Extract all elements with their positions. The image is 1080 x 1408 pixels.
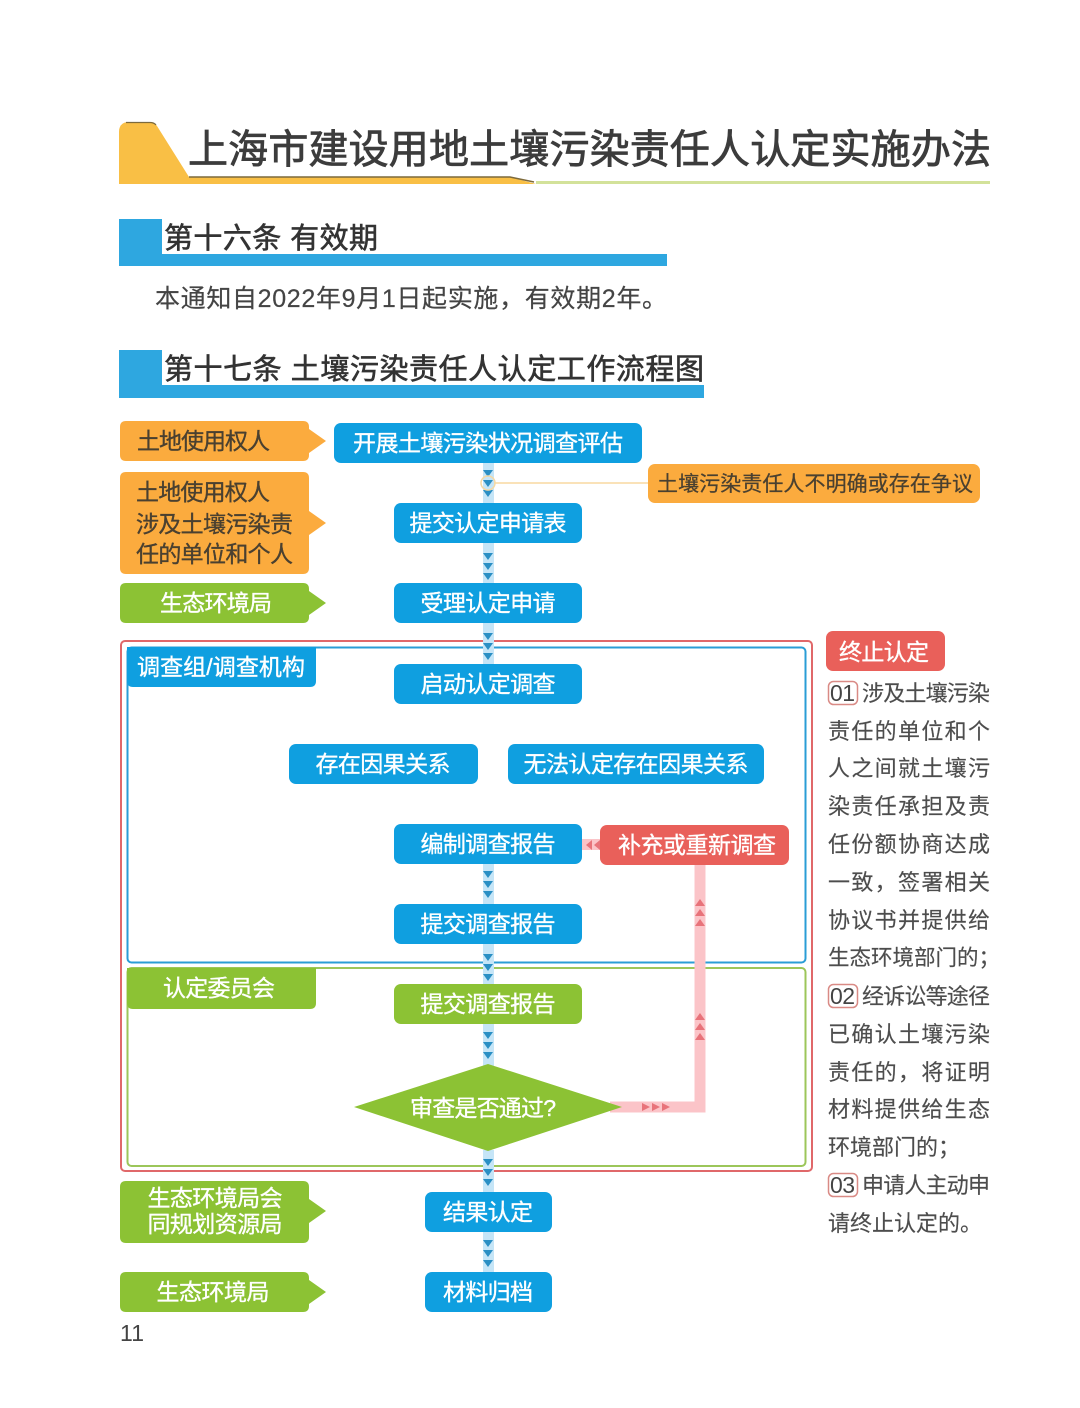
text block: termination conditions: 03 <box>830 1172 855 1198</box>
heading: article 17 <box>119 350 704 398</box>
box: submit report: 提交调查报告 <box>420 911 556 937</box>
box: submit application <box>394 503 582 543</box>
tag: bureau with planning: 生态环境局会 <box>148 1185 282 1211</box>
box: compile report <box>394 824 582 864</box>
heading: article 16: 第十六条 有效期 <box>164 222 378 255</box>
diamond: review passed: 审查是否通过? <box>410 1095 556 1121</box>
box: start survey <box>334 423 642 463</box>
text block: termination conditions: 生态环境部门的； <box>828 946 1000 970</box>
tag: ecology bureau archive: 生态环境局 <box>156 1279 270 1305</box>
tag: bureau with planning: 同规划资源局 <box>148 1211 282 1237</box>
title banner <box>119 122 991 184</box>
text block: termination conditions: 材料提供给生态 <box>828 1097 990 1122</box>
text block: termination conditions: 责任的，将证明 <box>828 1060 990 1085</box>
text block: termination conditions: 经诉讼等途径 <box>862 984 990 1009</box>
text block: termination conditions: 涉及土壤污染 <box>862 681 990 706</box>
box: start survey: 开展土壤污染状况调查评估 <box>353 430 623 456</box>
box: re-investigate: 补充或重新调查 <box>618 832 776 858</box>
label: committee <box>127 968 316 1009</box>
box: result: 结果认定 <box>443 1199 533 1225</box>
box: start investigation <box>394 664 582 704</box>
box: result <box>425 1192 552 1232</box>
frame: investigation group <box>128 648 806 962</box>
text block: termination conditions: 环境部门的； <box>828 1135 960 1160</box>
tag: land users and polluters: 涉及土壤污染责 <box>136 511 293 537</box>
text block: termination conditions: 任份额协商达成 <box>828 832 990 857</box>
text block: termination conditions: 请终止认定的。 <box>828 1211 982 1236</box>
heading: article 16 <box>119 219 667 266</box>
box: submit report green: 提交调查报告 <box>420 991 556 1017</box>
tag: land use right holder <box>120 421 326 461</box>
text block: termination conditions: 染责任承担及责 <box>828 794 990 819</box>
box: accept application: 受理认定申请 <box>420 590 556 616</box>
connector: return path <box>582 839 705 1111</box>
box: start investigation: 启动认定调查 <box>420 671 556 697</box>
body text: validity: 本通知自2022年9月1日起实施，有效期2年。 <box>155 285 667 313</box>
box: no causal link: 无法认定存在因果关系 <box>524 751 748 777</box>
box: submit report green <box>394 984 582 1024</box>
label: committee: 认定委员会 <box>163 975 275 1001</box>
tag: ecology bureau archive <box>120 1272 326 1312</box>
box: no causal link <box>508 744 764 784</box>
text block: termination conditions: 一致，签署相关 <box>828 870 990 895</box>
text block: termination conditions: 01 <box>830 680 855 706</box>
text block: termination conditions: 已确认土壤污染 <box>828 1022 990 1047</box>
box: archive <box>425 1272 552 1312</box>
frame: committee <box>128 968 806 1166</box>
badge: termination <box>826 631 945 671</box>
tag: ecology bureau: 生态环境局 <box>160 590 272 616</box>
connector: vertical flow line <box>483 463 494 1272</box>
heading: article 17: 第十七条 土壤污染责任人认定工作流程图 <box>164 353 704 386</box>
label: investigation group <box>127 647 316 687</box>
box: archive: 材料归档 <box>443 1279 533 1305</box>
tag: land users and polluters: 任的单位和个人 <box>136 541 293 567</box>
text block: termination conditions: 人之间就土壤污 <box>828 756 990 781</box>
text block: termination conditions: 申请人主动申 <box>862 1173 990 1198</box>
badge: termination: 终止认定 <box>839 639 929 665</box>
tag: ecology bureau <box>120 583 326 623</box>
box: re-investigate <box>600 825 789 865</box>
text block: termination conditions <box>828 680 1000 1236</box>
title banner: 上海市建设用地土壤污染责任人认定实施办法 <box>188 128 991 172</box>
frame: outer red <box>121 641 812 1171</box>
box: dispute note <box>648 464 980 503</box>
label: investigation group: 调查组/调查机构 <box>137 654 305 680</box>
tag: bureau with planning <box>120 1181 326 1243</box>
diamond: review passed <box>354 1064 622 1151</box>
tag: land users and polluters: 土地使用权人 <box>136 479 270 505</box>
text block: termination conditions: 02 <box>830 983 855 1009</box>
tag: land use right holder: 土地使用权人 <box>137 428 270 454</box>
tag: land users and polluters <box>120 472 326 574</box>
box: submit report <box>394 904 582 944</box>
box: accept application <box>394 583 582 623</box>
connector: dispute branch line <box>481 476 648 490</box>
box: causal link <box>289 744 478 784</box>
box: submit application: 提交认定申请表 <box>410 510 566 536</box>
box: dispute note: 土壤污染责任人不明确或存在争议 <box>657 473 973 496</box>
box: causal link: 存在因果关系 <box>316 751 450 777</box>
text block: termination conditions: 责任的单位和个 <box>828 719 990 744</box>
box: compile report: 编制调查报告 <box>420 831 556 857</box>
page number: 11 <box>120 1320 144 1346</box>
text block: termination conditions: 协议书并提供给 <box>828 908 990 933</box>
